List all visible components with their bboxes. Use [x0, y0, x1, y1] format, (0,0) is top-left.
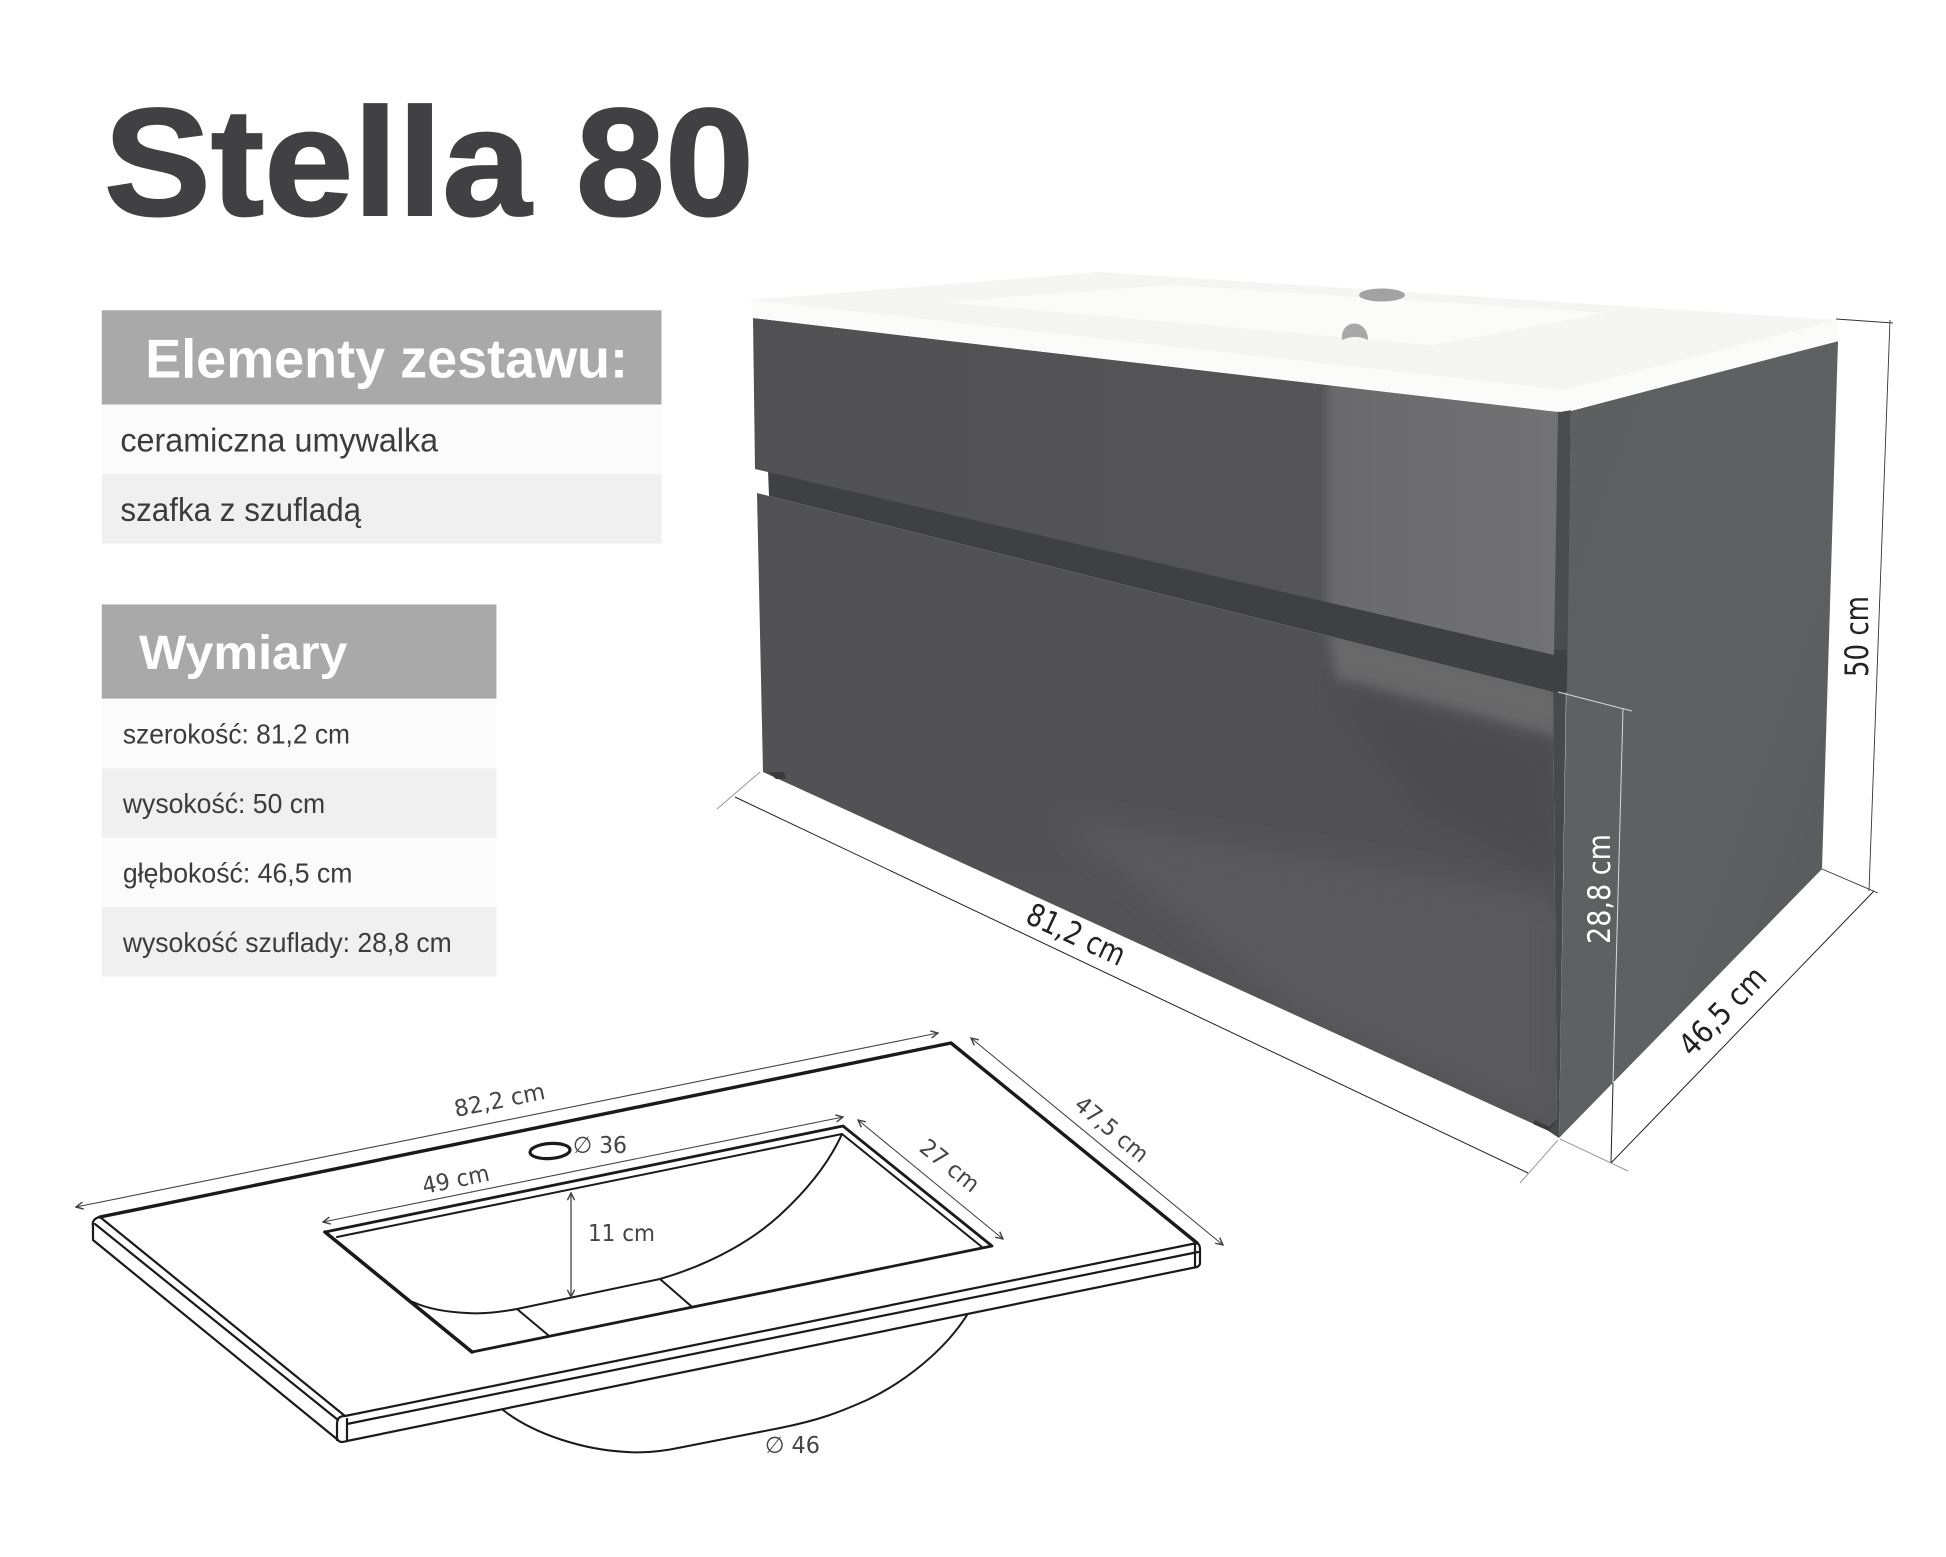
- dimension: 46,5 cm: 46,5 cm: [1672, 959, 1774, 1064]
- heading: elementy zestawu: [102, 310, 661, 405]
- tap hole: [1359, 288, 1405, 302]
- dimension: 47,5 cm: [971, 1038, 1223, 1245]
- bowl drain lines: [517, 1279, 691, 1335]
- lower bowl curve: [503, 1315, 967, 1452]
- dimension: 82,2 cm: [76, 1033, 938, 1207]
- list row: ceramiczna umywalka: [102, 405, 661, 474]
- cabinet feet: [768, 772, 1557, 1131]
- basin recess: [943, 285, 1607, 345]
- groove between drawers: [768, 470, 1567, 692]
- dimension: 82,2 cm: 82,2 cm: [452, 1079, 547, 1123]
- label: bowl diameter: ∅ 46: [765, 1433, 820, 1459]
- tap hole: [530, 1142, 570, 1160]
- dimension: 28,8 cm: [1558, 692, 1632, 1163]
- panel: elementy zestawu: [102, 310, 661, 544]
- row: glebokosc: głębokość: 46,5 cm: [123, 857, 352, 888]
- basin inner rim: [337, 1134, 982, 1247]
- slab rounded edges and front faces: [93, 1217, 1200, 1442]
- list row: szafka z szuflada: szafka z szufladą: [120, 492, 361, 529]
- row: szerokosc: [102, 699, 496, 768]
- dimension: 50 cm: [1822, 319, 1893, 893]
- row: wysokosc: [102, 768, 496, 838]
- heading: wymiary: [102, 604, 496, 699]
- overflow hole: [1342, 324, 1368, 340]
- cabinet front edge strip: [1553, 410, 1571, 692]
- panel: wymiary: [102, 604, 496, 977]
- dimension: 47,5 cm: 47,5 cm: [1069, 1092, 1153, 1168]
- row: wysokosc szuflady: wysokość szuflady: 28,8 cm: [122, 927, 452, 958]
- upper drawer front: [753, 318, 1558, 655]
- bowl inner curve: [413, 1134, 842, 1313]
- lower drawer front: [757, 493, 1557, 1130]
- row: glebokosc: [102, 838, 496, 907]
- ceramic basin front edge: [750, 300, 1839, 412]
- dimension: 11 cm: [571, 1193, 655, 1297]
- cabinet illustration: [750, 272, 1839, 1138]
- list row: szafka z szuflada: [102, 474, 661, 544]
- lower front edge strip: [1547, 692, 1566, 1138]
- dimension: 50 cm: 50 cm: [1838, 596, 1876, 677]
- dimension: 49 cm: 49 cm: [420, 1161, 492, 1200]
- heading: wymiary: Wymiary: [139, 626, 348, 680]
- row: wysokosc szuflady: [102, 907, 496, 977]
- lower drawer reflections: [1168, 636, 1557, 1104]
- heading: elementy zestawu: Elementy zestawu:: [145, 328, 628, 389]
- ceramic basin top: [750, 272, 1838, 390]
- dimension: 27 cm: [858, 1120, 1003, 1239]
- row: wysokosc: wysokość: 50 cm: [122, 788, 325, 819]
- basin opening: [325, 1126, 992, 1352]
- dimension: 11 cm: 11 cm: [588, 1221, 655, 1247]
- dimension: 81,2 cm: 81,2 cm: [1021, 897, 1131, 974]
- washbasin line drawing: [93, 1043, 1200, 1452]
- back edge thick lines: [100, 1043, 1197, 1243]
- dimension: 27 cm: 27 cm: [914, 1134, 984, 1198]
- dimension: 28,8 cm: 28,8 cm: [1582, 834, 1618, 944]
- dimension: 81,2 cm: [717, 772, 1558, 1183]
- row: szerokosc: szerokość: 81,2 cm: [123, 718, 350, 749]
- dimension: 49 cm: [323, 1117, 843, 1222]
- outer slab top face: [100, 1043, 1197, 1416]
- title: Stella 80: [104, 77, 754, 248]
- cabinet side panel: [1559, 341, 1838, 1138]
- list row: ceramiczna umywalka: ceramiczna umywalka: [120, 423, 438, 460]
- label: tap hole diameter: ∅ 36: [573, 1133, 627, 1159]
- dimension: 46,5 cm: [1560, 891, 1874, 1171]
